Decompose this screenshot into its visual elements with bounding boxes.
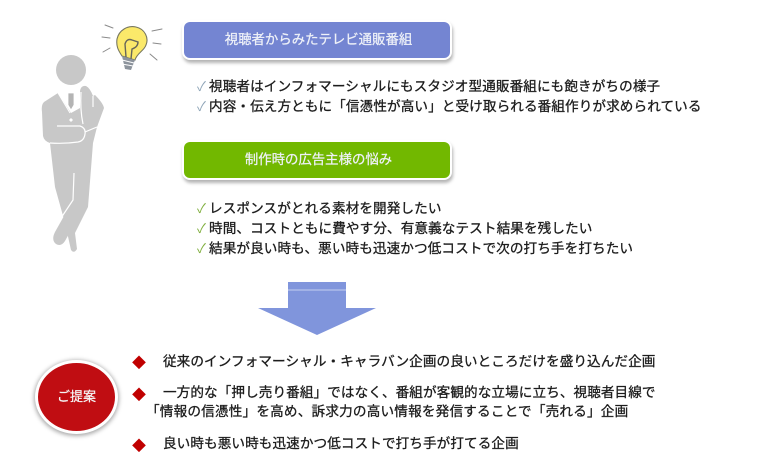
arrow: down — [258, 282, 376, 335]
heading: viewer perspective — [184, 22, 450, 58]
bullet: advertiser point 3: 結果が良い時も、悪い時も迅速かつ低コストで次の打ち手を打ちたい — [209, 241, 633, 256]
text block: advertiser points — [197, 201, 633, 256]
badge: proposal: ご提案 — [57, 389, 96, 404]
proposal 3: 良い時も悪い時も迅速かつ低コストで打ち手が打てる企画 — [163, 436, 519, 451]
bullet: advertiser point 2: ✓ — [197, 221, 206, 236]
proposal list — [132, 354, 656, 452]
icon: thinking businessman figure — [42, 55, 104, 252]
bullet: viewer point 2: ✓ — [197, 99, 206, 114]
proposal 2: ◆ — [132, 387, 146, 403]
heading: advertiser concerns — [184, 142, 450, 178]
bullet: advertiser point 2: 時間、コストともに費やす分、有意義なテスト結果を残したい — [209, 221, 592, 236]
bullet: viewer point 2: 内容・伝え方ともに「信憑性が高い」と受け取られる番組作りが求められている — [209, 99, 702, 114]
proposal 2: 「情報の信憑性」を高め、訴求力の高い情報を発信することで「売れる」企画 — [146, 404, 628, 419]
proposal 2 — [132, 384, 656, 419]
icon: light bulb — [102, 24, 162, 70]
heading: viewer perspective: 視聴者からみたテレビ通販番組 — [225, 32, 412, 47]
bullet: viewer point 1: 視聴者はインフォマーシャルにもスタジオ型通販番組にも飽きがちの様子 — [209, 79, 660, 94]
bullet: viewer point 1: ✓ — [197, 79, 206, 94]
proposal 1: 従来のインフォマーシャル・キャラバン企画の良いところだけを盛り込んだ企画 — [163, 354, 655, 369]
bullet: advertiser point 1: レスポンスがとれる素材を開発したい — [209, 201, 442, 216]
bullet: advertiser point 1: ✓ — [197, 201, 206, 216]
text block: viewer points — [197, 79, 702, 114]
proposal 1: ◆ — [132, 355, 146, 371]
proposal 2: 一方的な「押し売り番組」ではなく、番組が客観的な立場に立ち、視聴者目線で — [163, 385, 656, 400]
heading: advertiser concerns: 制作時の広告主様の悩み — [245, 152, 392, 167]
badge: proposal — [35, 360, 118, 434]
bullet: advertiser point 3: ✓ — [197, 241, 206, 256]
